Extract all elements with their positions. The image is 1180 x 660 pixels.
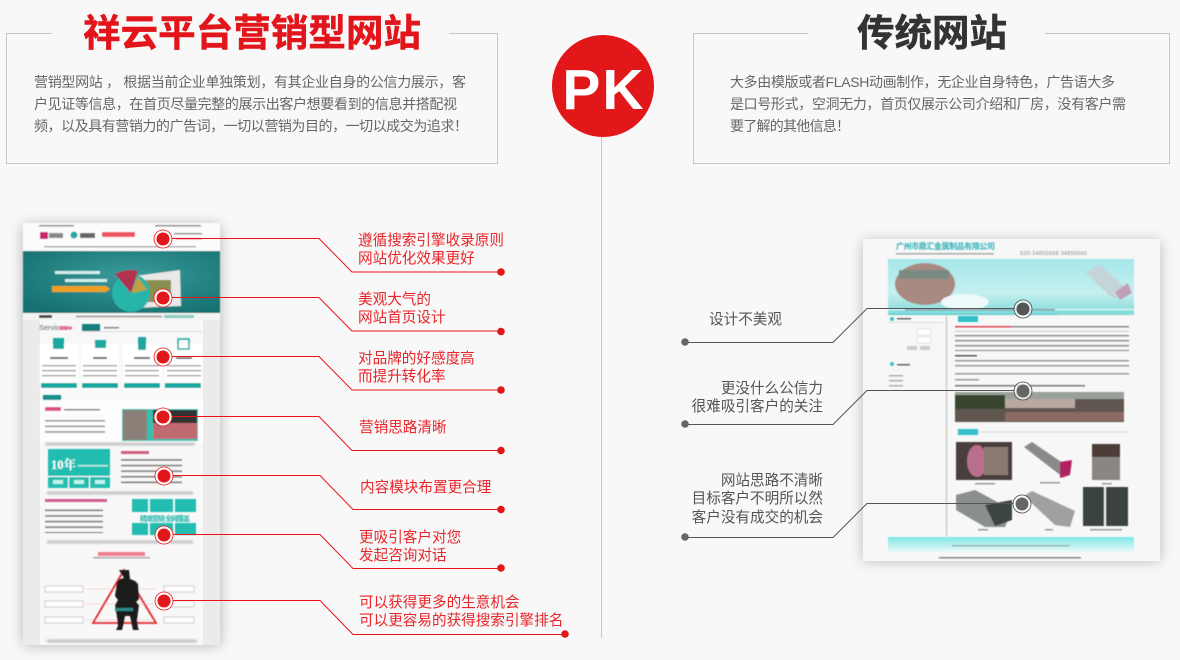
service cards <box>40 337 202 390</box>
callout: unclear thinking: 目标客户不明所以然 <box>692 490 823 507</box>
callout: search engine rules: 遵循搜索引擎收录原则 <box>358 231 504 249</box>
product photos <box>956 442 1128 527</box>
callout: search engine rules <box>154 230 505 276</box>
section: ten years <box>47 449 193 494</box>
description text: 要了解的其他信息！ <box>730 118 850 134</box>
banner <box>888 259 1134 315</box>
callout: consultation: 更吸引客户对您 <box>359 529 461 546</box>
callout: clear marketing <box>154 408 505 454</box>
services heading <box>39 323 202 332</box>
section: precision marketing <box>45 499 196 543</box>
description text <box>34 74 468 134</box>
description text <box>730 74 1126 134</box>
description text: 户见证等信息，在首页尽量完整的展示出客户想要看到的信息并搭配视 <box>34 96 457 112</box>
section: worried figure <box>45 552 197 642</box>
callout: brand favorability <box>154 348 505 394</box>
callout: unclear thinking <box>681 472 1031 541</box>
callout: lacks credibility <box>681 380 1032 428</box>
company english name <box>896 253 994 254</box>
description text: 频，以及具有营销力的广告词，一切以营销为目的，一切以成交为追求！ <box>34 118 468 134</box>
heading: marketing website: 祥云平台营销型网站 <box>83 12 421 54</box>
callout: consultation: 发起咨询对话 <box>359 547 447 564</box>
section: ten years: 10年 <box>51 457 76 472</box>
panel frame <box>6 34 498 164</box>
traditional website screenshot <box>863 239 1160 561</box>
callout: poor design: 设计不美观 <box>709 311 782 328</box>
factory photo <box>955 392 1124 422</box>
callout: homepage design: 美观大气的 <box>358 291 431 308</box>
callout: poor design <box>681 300 1032 346</box>
callout: brand favorability: 而提升转化率 <box>358 368 446 385</box>
callout: search engine rules: 网站优化效果更好 <box>358 250 475 267</box>
callout: business opportunities: 可以更容易的获得搜索引擎排名 <box>359 612 563 629</box>
callout: module layout <box>155 467 505 513</box>
callout: consultation <box>155 526 505 572</box>
center divider <box>600 130 602 638</box>
callout: lacks credibility: 很难吸引客户的关注 <box>692 398 823 415</box>
PK badge: PK <box>562 58 646 122</box>
description text: 营销型网站 ， 根据当前企业单独策划，有其企业自身的公信力展示，客 <box>34 74 466 90</box>
description text: 大多由模版或者FLASH动画制作，无企业自身特色，广告语大多 <box>730 74 1115 90</box>
hero banner <box>23 251 220 313</box>
callout: clear marketing: 营销思路清晰 <box>359 419 447 436</box>
callout: business opportunities <box>155 592 569 638</box>
products heading <box>958 429 978 435</box>
product captions <box>975 482 1122 530</box>
description text: 是口号形式，空洞无力，首页仅展示公司介绍和厂房，没有客户需 <box>730 96 1126 112</box>
notice bar <box>23 313 220 320</box>
intro text <box>955 316 1129 386</box>
callout: homepage design: 网站首页设计 <box>358 309 446 326</box>
callout: homepage design <box>154 289 505 335</box>
callout: brand favorability: 对品牌的好感度高 <box>358 350 475 367</box>
section: precision marketing: 精准营销 全网覆盖 <box>140 514 190 523</box>
company name: 广州市鼎汇金属制品有限公司 <box>896 241 995 251</box>
callout: business opportunities: 可以获得更多的生意机会 <box>359 593 520 611</box>
footer <box>888 537 1134 558</box>
panel frame <box>694 34 1170 164</box>
panel: marketing website intro <box>6 12 498 164</box>
site header <box>23 223 220 251</box>
callout: lacks credibility: 更没什么公信力 <box>721 380 823 397</box>
services heading: Services <box>39 323 68 332</box>
callout: module layout: 内容模块布置更合理 <box>360 479 492 496</box>
callout: unclear thinking: 网站思路不清晰 <box>721 472 823 489</box>
callout: unclear thinking: 客户没有成交的机会 <box>692 508 823 526</box>
heading: traditional website: 传统网站 <box>857 12 1007 54</box>
marketing website screenshot <box>23 223 220 645</box>
PK badge <box>552 35 654 137</box>
phone: 020-34855668 34855666 <box>1020 251 1087 257</box>
left sidebar <box>888 316 947 536</box>
panel: traditional website intro <box>694 12 1170 164</box>
section: company intro <box>40 395 203 445</box>
